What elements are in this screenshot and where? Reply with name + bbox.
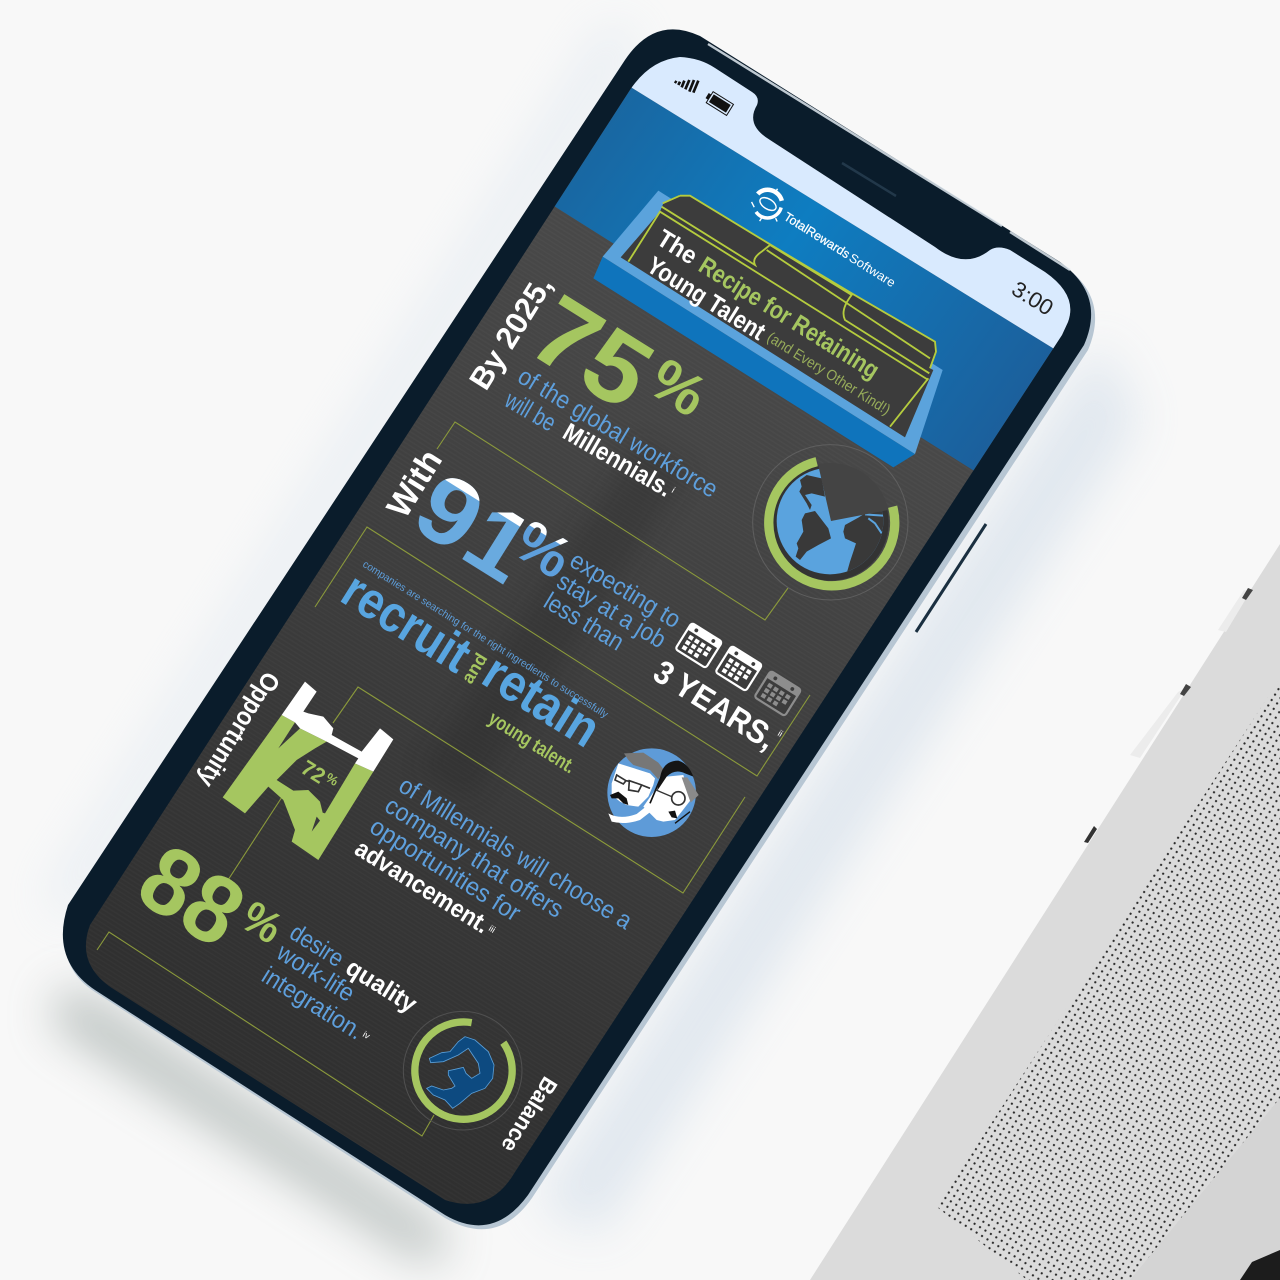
stat: 91%: 91 [397,452,551,604]
notch speaker [842,163,896,196]
clock 3:00: 3:00 [1007,276,1058,321]
stat: 75%: will be [499,386,561,437]
title panel: folder tray [593,191,943,467]
stat: 75%: Millennials. [558,418,677,503]
stat: 75%: of the global workforce [513,362,723,504]
recruit and retain: recruit [332,561,481,684]
icon: logo mark [745,181,792,229]
title: The [652,224,702,270]
connector box: balance section [97,932,434,1136]
title panel: folder tray: (and Every Other Kind!) [764,329,893,419]
stat: 88%: desire [285,918,349,973]
stat: 91%: With [380,443,450,524]
stat: 88%: quality [341,953,422,1018]
status bar [632,57,1070,348]
logo [745,181,898,290]
connector box: opportunity section [228,687,745,893]
stat: 88% [121,824,422,1045]
icon: hands on bar with 72% [223,682,393,860]
stat: 75%: i [670,485,677,495]
stat: 91%: % [503,508,583,592]
stat: 91% [385,453,678,650]
icon: calendars [675,623,801,716]
section label: Balance: Balance [496,1072,563,1157]
phone silver rim [65,31,1095,1229]
blue header band [554,88,1054,470]
top edge highlight [708,44,1070,270]
connector box: 91% section [437,422,788,620]
label: 72%: % [323,770,341,789]
stat: 91%: less than [539,587,629,656]
stat: 88%: 88 [121,824,262,968]
icon: yoga balance ring [403,1011,522,1130]
text: 72% of millennials: opportunities for [365,812,526,927]
text: 72% of millennials: of Millennials will choose a [394,771,637,935]
logo: Software [846,251,898,290]
title panel: folder tray: Recipe for Retaining [694,251,884,385]
stat: 88%: integration. [257,961,368,1045]
text: 3 years: 3 YEARS, [647,653,783,757]
label: 72%: 72 [297,756,330,789]
stat: 75%: 75 [512,274,672,431]
screen [86,57,1070,1204]
laptop on desk [810,544,1280,1280]
stat: 91%: stay at a job [552,567,671,654]
recruit and retain [332,558,611,778]
tray [593,191,943,467]
icon: millennial faces [607,748,699,837]
title panel: folder tray: Young Talent [642,251,771,346]
logo wordmark: TotalRewards [781,210,852,261]
stat: 91%: % [503,508,583,592]
recruit and retain: companies are searching for the right ingredients to successfully [360,558,611,721]
side button [916,524,986,632]
recruit and retain: young talent. [484,708,579,778]
connector box: recruit section [315,527,810,776]
screen gray background [86,57,1070,1204]
text: 72% of millennials: company that offers [380,791,569,924]
recruit and retain: and [457,649,491,687]
stat: 88%: iv [361,1029,372,1041]
section label: Opportunity: Opportunity [192,667,286,793]
icon: signal bars [675,80,698,93]
stat: 91%: expecting to [565,546,686,634]
phone [62,29,1096,1230]
icon: battery [704,90,733,115]
stat: 75% [462,269,723,504]
soft reflection band [524,460,670,666]
stat: 88%: work-life [271,938,360,1008]
text: 3 years: ii [776,728,785,739]
stat: 91%: 91 [397,452,551,604]
stat: 75%: % [638,346,718,430]
stat: 75%: By 2025, [462,269,559,396]
phone body [63,29,1091,1225]
text: 72% of millennials: iii [487,923,497,935]
icon: globe [753,445,908,600]
stat: 88%: % [233,892,291,954]
recruit and retain: retain [473,643,610,759]
text: 72% of millennials: advancement. [350,834,494,939]
